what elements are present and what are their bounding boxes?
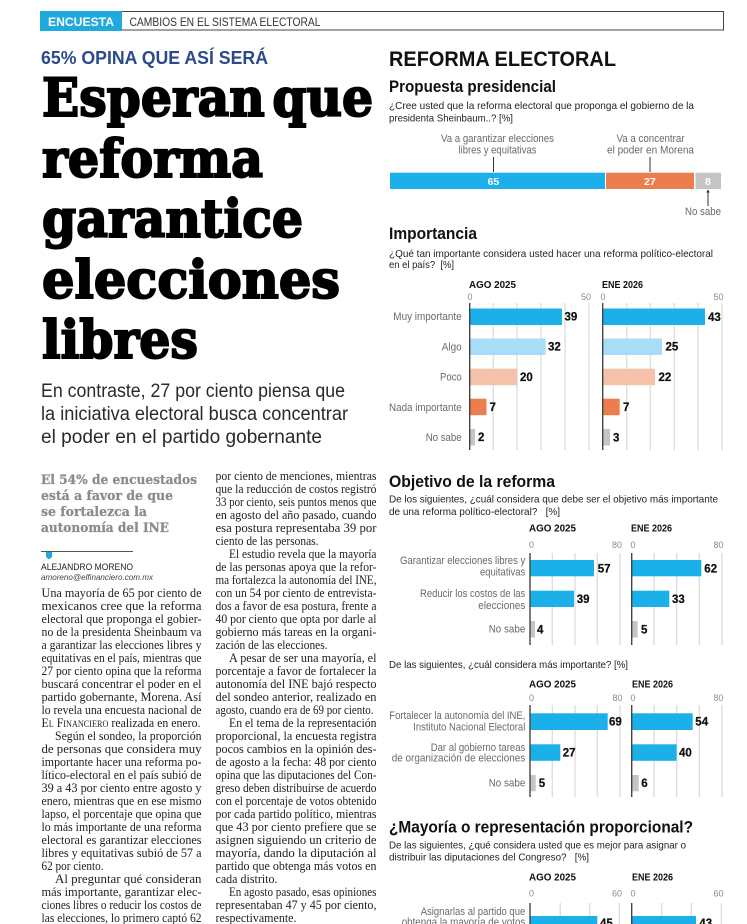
article column 1: a garantizar las elecciones libres y [42, 637, 202, 652]
article column 2: autonomía del INE bajó respecto [216, 676, 376, 691]
bar chart: enero 2026 [630, 523, 724, 645]
bar chart: enero 2026: 40 [679, 748, 692, 760]
bar chart: enero 2026: 6 [641, 778, 648, 790]
bar chart: agosto 2025 [529, 523, 622, 645]
bar chart: enero 2026: ENE 2026 [632, 872, 673, 884]
article column 2: asignen siguiendo un criterio de [216, 832, 377, 847]
bar chart: agosto 2025: 4 [537, 624, 544, 636]
panel: propuesta presidencial: Va a concentrar [616, 133, 685, 145]
headline: libres [42, 310, 198, 371]
bar chart: enero 2026: 22 [658, 372, 671, 384]
bar chart: agosto 2025 [529, 872, 622, 924]
deck: autonomía del INE [41, 521, 169, 536]
bar chart: agosto 2025: AGO 2025 [529, 679, 576, 691]
article column 2: dos a favor de esa postura, frente a [216, 598, 377, 613]
article column 2: de agosto a la fecha: 48 por ciento [216, 754, 376, 769]
article column 2: greso deben distribuirse de acuerdo [216, 780, 376, 795]
article column 2: ma fortalezca la autonomía del INE, [216, 572, 376, 587]
article column 2: ciento de las personas. [216, 533, 318, 548]
category labels: No sabe [489, 778, 525, 790]
article column 1: mexicanos cree que la reforma [42, 598, 202, 613]
article column 1: buscará concentrar el poder en el [42, 676, 202, 691]
subheadline: el poder en el partido gobernante [41, 427, 322, 448]
article column 2: proporcional, la encuesta registra [216, 728, 377, 743]
graphic title: REFORMA ELECTORAL [389, 48, 616, 71]
category labels: de organización de elecciones [392, 753, 526, 765]
article column 1: de personas que considera muy [42, 741, 202, 756]
category labels: Muy importante [393, 311, 462, 323]
bar chart: agosto 2025: 20 [520, 372, 533, 384]
section header bar [40, 11, 724, 31]
article column 2: cada distrito. [216, 871, 278, 886]
article column 1: El Financiero realizada en enero. [42, 715, 200, 730]
article column 2: que la reducción de costos registró [216, 481, 376, 496]
section header bar: ENCUESTA [48, 17, 114, 29]
panel: propuesta presidencial [389, 77, 721, 218]
bar chart: enero 2026: 50 [714, 292, 724, 302]
article column 2: esa postura representaba 39 por [216, 520, 377, 535]
bar chart: enero 2026: 0 [600, 292, 606, 302]
bar chart: agosto 2025 [529, 679, 623, 797]
bar chart: agosto 2025: 69 [609, 716, 622, 728]
headline [42, 68, 373, 371]
category labels: No sabe [426, 432, 462, 444]
article column 1: Al preguntar qué consideran [55, 871, 202, 886]
bar chart: agosto 2025: 0 [529, 693, 534, 703]
bar chart: agosto 2025 [468, 279, 591, 450]
panel: importancia: ¿Qué tan importante considera usted hacer una reforma político-electoral [389, 248, 713, 260]
bar chart: enero 2026 [600, 279, 724, 450]
bar chart: agosto 2025: 80 [612, 540, 622, 550]
bar chart: enero 2026: 54 [695, 716, 709, 728]
headline: garantice [42, 189, 303, 250]
bar chart: enero 2026: 5 [641, 624, 648, 636]
article column 2: agosto, cuando era de 69 por ciento. [216, 702, 374, 717]
bar chart: enero 2026: ENE 2026 [631, 523, 672, 535]
panel: objetivo de la reforma: De los siguientes, ¿cuál considera que debe ser el objetivo más importante [389, 494, 718, 506]
article column 2: gobierno más tareas en la organi- [216, 624, 376, 639]
bar chart: agosto 2025: 57 [598, 564, 610, 576]
bar chart: enero 2026: 3 [613, 432, 619, 444]
bar chart: agosto 2025: 5 [539, 778, 546, 790]
bar chart: enero 2026: ENE 2026 [632, 679, 673, 691]
bar chart: enero 2026 [630, 679, 724, 797]
bar chart: agosto 2025: 32 [548, 342, 561, 354]
deck: El 54% de encuestados [41, 473, 197, 488]
article column 1: libres y equitativas subió de 57 a [42, 845, 202, 860]
panel: mayoria o representacion proporcional: ¿Mayoría o representación proporcional? [389, 818, 693, 837]
panel: propuesta presidencial: presidenta Sheinbaum..? [%] [389, 112, 513, 124]
article column 1: equitativas en el país, mientras que [42, 650, 202, 665]
category labels: No sabe [489, 624, 525, 636]
panel: propuesta presidencial: No sabe [685, 206, 721, 218]
panel: propuesta presidencial: el poder en Morena [607, 144, 695, 156]
headline: elecciones [42, 250, 340, 311]
category labels: Instituto Nacional Electoral [413, 722, 525, 734]
article column 2: En agosto pasado, esas opiniones [229, 884, 376, 899]
article column 1: 39 a 43 por ciento entre agosto y [42, 780, 202, 795]
bar chart: enero 2026: ENE 2026 [602, 279, 643, 291]
bar chart: enero 2026: 80 [714, 540, 724, 550]
bar chart: agosto 2025: 39 [564, 312, 577, 324]
article column 1: enero, mientras que en ese mismo [42, 793, 202, 808]
category labels: Dar al gobierno tareas [431, 742, 526, 754]
article column 1: lo más importante de una reforma [42, 819, 202, 834]
bar chart: enero 2026: 7 [623, 402, 629, 414]
panel: mayoria o representacion proporcional: distribuir las diputaciones del Congreso? [%] [389, 852, 589, 864]
deck: se fortalezca la [41, 505, 148, 520]
panel: propuesta presidencial: Va a garantizar elecciones [441, 133, 554, 145]
byline [41, 552, 154, 582]
panel: objetivo de la reforma [389, 472, 724, 797]
article column 1: partido gobernante, Morena. Así [42, 689, 202, 704]
panel: propuesta presidencial: ¿Cree usted que la reforma electoral que proponga el gobierno de la [389, 100, 694, 112]
bar chart: enero 2026: 60 [714, 889, 724, 899]
article column 1: no de la presidenta Sheinbaum va [42, 624, 202, 639]
headline: reforma [42, 129, 263, 190]
category labels: elecciones [478, 600, 526, 612]
bar chart: enero 2026: 25 [666, 342, 679, 354]
panel: propuesta presidencial: Propuesta presidencial [389, 77, 556, 96]
category labels: Asignarlas al partido que [421, 906, 525, 918]
category labels [389, 710, 526, 790]
headline: Esperan que [42, 68, 373, 129]
panel: propuesta presidencial: 27 [644, 176, 656, 188]
article column 2: del sondeo anterior, realizado en [216, 689, 377, 704]
article column 1: más importante, garantizar elec- [42, 884, 202, 899]
article column 2: partido que obtenga más votos en [216, 858, 377, 873]
subheadline: la iniciativa electoral busca concentrar [41, 404, 349, 425]
article column 2: por cada partido político, mientras [216, 806, 376, 821]
article column 2: pocos cambios en la opinión des- [216, 741, 376, 756]
bar chart: agosto 2025: AGO 2025 [469, 279, 516, 291]
bar chart: agosto 2025: 0 [529, 540, 534, 550]
article column 1: Una mayoría de 65 por ciento de [42, 585, 202, 600]
bar chart: enero 2026 [630, 872, 724, 924]
bar chart: agosto 2025: 39 [577, 594, 589, 606]
article column 1: Según el sondeo, la proporción [55, 728, 202, 743]
article column 1: ciones libres o reducir los costos de [42, 897, 202, 912]
bar chart: agosto 2025: 80 [612, 693, 623, 703]
category labels: Garantizar elecciones libres y [400, 555, 526, 567]
bar chart: agosto 2025: 0 [468, 292, 473, 302]
article column 2: A pesar de ser una mayoría, el [229, 650, 377, 665]
bar chart: enero 2026: 80 [714, 693, 724, 703]
article column 2: por ciento de menciones, mientras [216, 468, 376, 483]
kicker: 65% OPINA QUE ASÍ SERÁ [41, 47, 268, 68]
article column 2: zación de las elecciones. [216, 637, 328, 652]
article column 1: 62 por ciento. [42, 858, 104, 873]
article column 1: electoral es garantizar elecciones [42, 832, 202, 847]
article column 1: importante hacer una reforma po- [42, 754, 202, 769]
article column 2: mayoría, dando la diputación al [216, 845, 377, 860]
category labels: Nada importante [389, 402, 462, 414]
bar chart: enero 2026: 43 [708, 312, 721, 324]
category labels: Poco [440, 372, 462, 384]
panel: importancia: en el país? [%] [389, 259, 454, 271]
bar chart: agosto 2025: 0 [529, 889, 534, 899]
article column 2: en agosto del año pasado, cuando [216, 507, 376, 522]
article column 1: lapso, el porcentaje que opina que [42, 806, 202, 821]
article column 2: con un 54 por ciento de entrevista- [216, 585, 376, 600]
article column 2: 33 por ciento, seis puntos menos que [216, 494, 377, 509]
panel: propuesta presidencial: 65 [488, 176, 499, 188]
subheadline [41, 381, 349, 448]
category labels: Reducir los costos de las [420, 588, 526, 600]
panel: objetivo de la reforma: Objetivo de la reforma [389, 472, 556, 491]
category labels: equitativas [480, 567, 526, 579]
byline: ALEJANDRO MORENO [41, 562, 133, 573]
question: mas importante: De las siguientes, ¿cuál considera más importante? [%] [389, 659, 628, 671]
category labels [400, 555, 526, 636]
section header bar: CAMBIOS EN EL SISTEMA ELECTORAL [130, 15, 321, 29]
article column 2: con el porcentaje de votos obtenido [216, 793, 376, 808]
bar chart: agosto 2025: AGO 2025 [529, 872, 576, 884]
category labels: Algo [442, 342, 462, 354]
article column 2: En el tema de la representación [229, 715, 377, 730]
article column 2 [216, 468, 377, 924]
panel: mayoria o representacion proporcional [389, 818, 724, 924]
bar chart: enero 2026: 62 [704, 564, 717, 576]
article column 2: representaban 47 y 45 por ciento, [216, 897, 376, 912]
deck: está a favor de que [41, 489, 173, 504]
bar chart: enero 2026: 33 [672, 594, 685, 606]
article column 2: que 43 por ciento prefiere que se [216, 819, 377, 834]
bar chart: agosto 2025: AGO 2025 [529, 523, 576, 535]
deck [41, 473, 197, 536]
panel: objetivo de la reforma: de una reforma político-electoral? [%] [389, 506, 560, 518]
byline: amoreno@elfinanciero.com.mx [41, 572, 154, 582]
bar chart: agosto 2025: 50 [581, 292, 591, 302]
article column 2: opina que las diputaciones del Con- [216, 767, 376, 782]
article column 2: porcentaje a favor de fortalecer la [216, 663, 377, 678]
panel: importancia: Importancia [389, 224, 477, 243]
article column 1: lítico-electoral en el país subió de [42, 767, 202, 782]
panel: mayoria o representacion proporcional: De las siguientes, ¿qué considera usted que es mejor para asignar o [389, 840, 686, 852]
bar chart: agosto 2025: 7 [490, 402, 496, 414]
category labels [402, 906, 526, 924]
panel: propuesta presidencial: libres y equitativas [458, 144, 537, 156]
article column 1: 27 por ciento opina que la reforma [42, 663, 202, 678]
article column 2: El estudio revela que la mayoría [229, 546, 377, 561]
category labels [389, 311, 462, 444]
article column 1 [42, 585, 202, 924]
article column 2: de las personas apoya que la refor- [216, 559, 376, 574]
bar chart: enero 2026: 0 [630, 693, 636, 703]
article column 2: 40 por ciento que opta por darle al [216, 611, 377, 626]
bar chart: agosto 2025: 27 [563, 748, 575, 760]
bar chart: agosto 2025: 60 [612, 889, 622, 899]
bar chart: enero 2026: 0 [630, 540, 636, 550]
bar chart: enero 2026: 0 [630, 889, 636, 899]
article column 1: lo revela una encuesta nacional de [42, 702, 202, 717]
category labels: Fortalecer la autonomía del INE, [389, 710, 525, 722]
bar chart: agosto 2025: 2 [478, 432, 484, 444]
panel: importancia [389, 224, 724, 450]
article column 1: electoral que proponga el gobier- [42, 611, 202, 626]
panel: propuesta presidencial: 8 [705, 176, 711, 188]
subheadline: En contraste, 27 por ciento piensa que [41, 381, 345, 402]
